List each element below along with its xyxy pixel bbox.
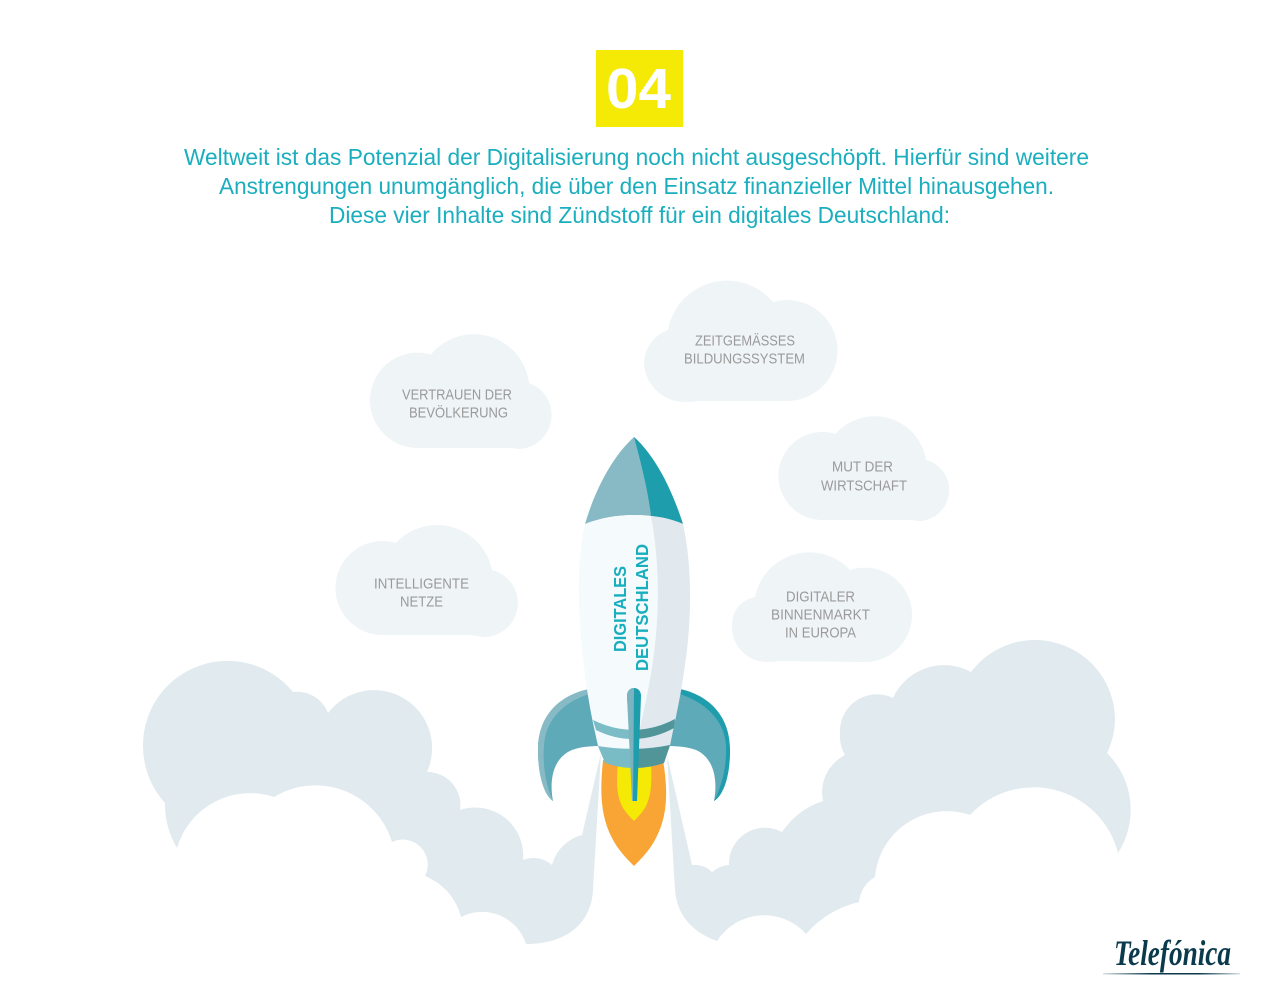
smoke: right xyxy=(667,640,1131,941)
cloud: Zeitgemäßes Bildungssystem: BILDUNGSSYSTEM xyxy=(684,350,805,368)
cloud: Digitaler Binnenmarkt in Europa: BINNENMARKT xyxy=(771,606,870,624)
cloud: Mut der Wirtschaft: MUT DER xyxy=(832,458,893,476)
fin: left xyxy=(538,689,600,801)
heading text xyxy=(184,144,1089,228)
cloud: Mut der Wirtschaft: WIRTSCHAFT xyxy=(821,478,907,494)
cloud: Zeitgemäßes Bildungssystem: ZEITGEMÄSSES xyxy=(695,332,795,350)
rocket label: DEUTSCHLAND xyxy=(632,544,652,671)
body xyxy=(579,515,690,750)
cloud: Vertrauen der Bevölkerung: BEVÖLKERUNG xyxy=(409,404,508,422)
cloud: Vertrauen der Bevölkerung xyxy=(370,334,552,449)
cloud: Mut der Wirtschaft xyxy=(778,416,949,521)
heading text: Anstrengungen unumgänglich, die über den Einsatz finanzieller Mittel hinausgehen. xyxy=(219,173,1054,199)
cloud: Zeitgemäßes Bildungssystem xyxy=(644,281,838,402)
cloud: Intelligente Netze: NETZE xyxy=(400,594,443,610)
centre fin xyxy=(627,688,641,801)
heading text: Diese vier Inhalte sind Zündstoff für ein digitales Deutschland: xyxy=(329,202,950,228)
cloud: Digitaler Binnenmarkt in Europa xyxy=(732,552,912,662)
cloud: Digitaler Binnenmarkt in Europa: DIGITALER xyxy=(786,588,855,606)
cloud: Vertrauen der Bevölkerung: VERTRAUEN DER xyxy=(402,386,512,404)
body bands and base xyxy=(593,719,675,768)
nose cone xyxy=(585,437,683,524)
rocket label: DIGITALES xyxy=(610,566,630,652)
logo: Telefónica: Telefónica xyxy=(1114,933,1231,973)
cloud: Digitaler Binnenmarkt in Europa: IN EUROPA xyxy=(785,624,856,642)
badge: number 04: 04 xyxy=(606,57,671,121)
cloud: Intelligente Netze: INTELLIGENTE xyxy=(374,576,469,592)
heading text: Weltweit ist das Potenzial der Digitalisierung noch nicht ausgeschöpft. Hierfür sind weitere xyxy=(184,144,1089,170)
rocket label xyxy=(610,544,652,671)
fin: right xyxy=(667,689,730,801)
rocket xyxy=(538,437,730,866)
smoke: left xyxy=(143,661,601,944)
flame xyxy=(601,760,666,866)
badge: number 04 xyxy=(596,50,683,127)
cloud: Intelligente Netze xyxy=(335,525,518,637)
